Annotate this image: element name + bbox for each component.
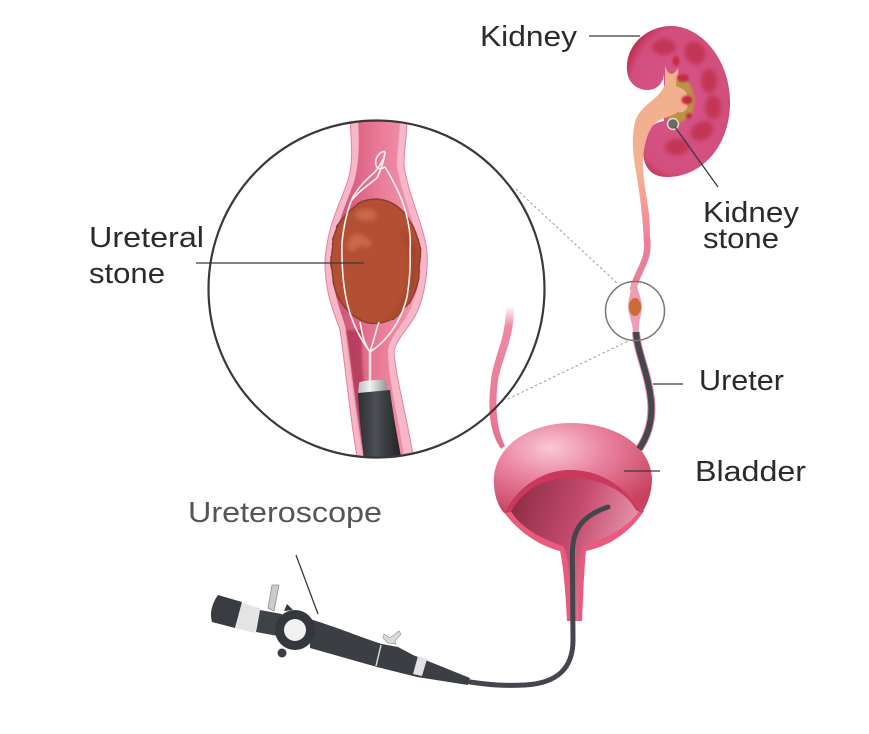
label: Kidney: Kidney [480,21,578,53]
head window [284,619,306,641]
small circle outline [606,282,664,340]
renal sinus fat [668,74,695,122]
label: Ureteral stone: stone [89,258,165,290]
small ureter bulge [628,282,642,332]
ureteroscope shaft through bladder and urethra [470,507,608,685]
ureteroscope instrument [211,585,470,685]
head knob top [284,604,293,611]
neck [256,610,282,636]
ureteroscope body [358,390,402,462]
scope in right ureter [636,331,651,449]
ureter wall in magnified view [325,118,427,462]
basket stem [369,352,371,382]
white ring [413,656,427,676]
kidney body [627,26,730,177]
renal pelvis and ureter [633,66,688,244]
bladder rim [504,470,642,513]
eyepiece [211,595,242,628]
kidney stone [668,118,678,130]
label: Kidney stone: stone [703,223,779,255]
label: Ureter: Ureter [699,365,784,397]
ureter lumen in magnified view [332,118,421,462]
bladder interior [510,470,640,620]
bladder dome [494,423,652,513]
ureteroscope tip [358,380,388,394]
magnifier small circle [606,282,664,340]
stone highlights [346,209,377,251]
magnifier outline [208,120,544,458]
label: Ureteroscope: Ureteroscope [188,497,382,529]
left ureter [489,306,514,449]
lower bladder wall and neck [503,511,644,621]
label: Kidney stone: Kidney [703,197,800,229]
main body [310,619,470,685]
small ureteral stone [629,298,641,316]
zoom guide: dotted lines [508,189,628,399]
ureteral stone [331,199,420,323]
ureter segment below kidney [633,238,647,290]
stone shadow [392,233,421,316]
thin ring [376,645,381,666]
magnifier disc [208,120,544,458]
label: Ureteral stone: Ureteral [89,222,204,254]
eyepiece white band [235,603,260,633]
valve [383,631,401,644]
infographic: ureteroscopic removal of a stone [90,25,806,688]
right ureter entering bladder [636,332,651,449]
leader lines [196,36,718,614]
kidney [627,26,730,244]
magnified view [208,118,544,462]
wall shadow [344,329,364,456]
head knob bottom [278,648,286,658]
bladder [494,332,652,621]
kidney calyces [672,56,692,119]
kidney medulla patches [652,38,721,155]
label: Bladder: Bladder [695,456,806,488]
head ring [275,610,315,650]
cable connector port [268,585,279,611]
wire basket [342,152,410,352]
